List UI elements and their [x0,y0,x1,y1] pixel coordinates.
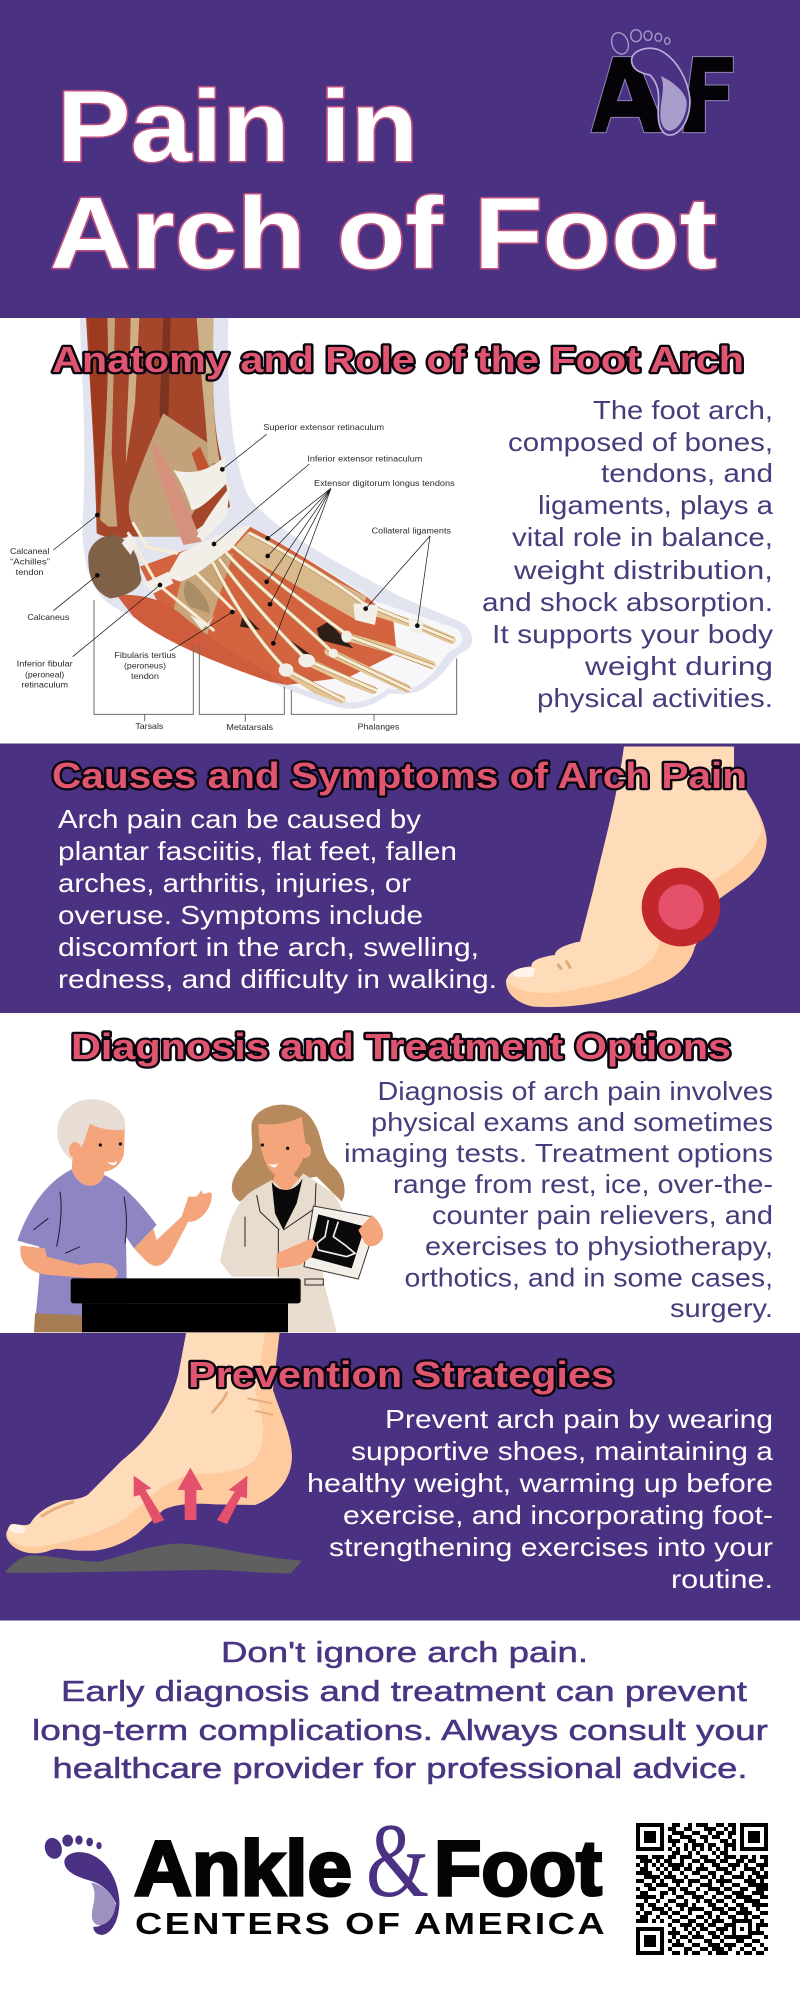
text: diagnosis body: counter pain relievers, and [432,1200,773,1230]
anatomy labels [10,422,455,732]
QR code [636,1825,768,1953]
text: diagnosis body: imaging tests. Treatment options [344,1138,773,1168]
text: closing call to action: Early diagnosis and treatment can prevent [61,1676,747,1708]
heading: prevention: Prevention Strategies [188,1354,614,1395]
text: causes body: arches, arthritis, injuries, or [58,868,411,898]
text: closing call to action: long-term complications. Always consult your [32,1715,768,1747]
text: closing call to action [32,1637,768,1785]
anatomy labels: Fibularis tertius [114,650,177,660]
text: diagnosis body: Diagnosis of arch pain involves [378,1076,773,1106]
text: prevention body: Prevent arch pain by wearing [385,1404,773,1434]
text: anatomy body: composed of bones, [508,427,773,457]
text: anatomy body: vital role in balance, [512,522,773,552]
text: causes body: Arch pain can be caused by [58,804,421,834]
text: diagnosis body [344,1076,773,1323]
panel: prevention strategies [0,1333,800,1620]
anatomy labels: tendon [16,567,44,577]
panel: anatomy [10,318,774,732]
anatomy labels: tendon [131,671,159,681]
text: diagnosis body: orthotics, and in some cases, [404,1262,773,1292]
heading: causes: Causes and Symptoms of Arch Pain [52,755,747,796]
anatomy labels: Tarsals [135,721,164,731]
heading: diagnosis: Diagnosis and Treatment Options [71,1026,731,1067]
text: causes body: redness, and difficulty in walking. [58,964,497,994]
text: anatomy body: The foot arch, [593,395,773,425]
illustration: foot with arch support and arrows [5,1333,302,1573]
text: anatomy body: weight distribution, [513,555,773,585]
illustration: patient and doctor with x-ray [17,1099,383,1332]
text: anatomy body: and shock absorption. [482,587,773,617]
footer logo: Ankle & Foot Centers of America: Ankle [134,1824,352,1912]
text: prevention body: healthy weight, warming up before [307,1468,773,1498]
illustration: foot with red pain spot [506,747,767,1007]
black redaction block [71,1278,301,1332]
anatomy labels: Metatarsals [226,722,274,732]
icon: purple footprint [42,1835,119,1935]
heading: anatomy: Anatomy and Role of the Foot Arch [52,339,744,380]
arrows: upward arch support [134,1468,247,1524]
patient figure [17,1099,212,1332]
text: anatomy body: ligaments, plays a [538,490,774,520]
footer logo: Ankle & Foot Centers of America: & [366,1802,429,1919]
anatomy labels: Inferior fibular [17,659,73,669]
toes [285,608,452,699]
anatomy labels: (peroneal) [25,669,64,679]
title [50,71,717,290]
text: causes body: overuse. Symptoms include [58,900,423,930]
anatomy labels: (peroneus) [124,661,166,671]
text: closing call to action: Don't ignore arch pain. [221,1637,588,1669]
text: causes body: discomfort in the arch, swelling, [58,932,479,962]
panel: title header [0,0,800,318]
footer logo: Ankle & Foot Centers of America [42,1802,607,1941]
anatomy labels: retinaculum [21,680,68,690]
footer logo: Ankle & Foot Centers of America: CENTERS OF AMERICA [135,1906,607,1941]
anatomy labels: Phalanges [358,721,400,731]
anatomy labels: Collateral ligaments [372,525,452,535]
anatomy labels: Extensor digitorum longus tendons [314,478,455,488]
text: anatomy body: weight during [584,651,773,681]
text: anatomy body: It supports your body [492,619,773,649]
anatomy labels: “Achilles” [10,557,50,567]
text: prevention body: routine. [671,1564,773,1594]
text: anatomy body [482,395,774,713]
text: anatomy body: physical activities. [537,683,773,713]
text: causes body [58,804,497,994]
text: prevention body: exercise, and incorporating foot- [343,1500,773,1530]
text: diagnosis body: physical exams and sometimes [371,1107,773,1137]
anatomy labels: Calcaneal [10,546,49,556]
anatomy labels: Inferior extensor retinaculum [307,454,422,464]
anatomy labels: Superior extensor retinaculum [263,422,384,432]
text: anatomy body: tendons, and [601,458,773,488]
text: prevention body: supportive shoes, maintaining a [351,1436,774,1466]
icon: AF foot logo [591,30,733,135]
illustration: labelled foot anatomy [10,318,472,732]
title: Pain in [57,71,418,183]
footer logo: Ankle & Foot Centers of America: Foot [434,1824,602,1912]
text: diagnosis body: range from rest, ice, over-the- [393,1169,773,1199]
doctor figure [220,1105,383,1332]
text: prevention body [307,1404,774,1594]
text: prevention body: strengthening exercises into your [329,1532,773,1562]
panel: causes and symptoms [0,744,800,1013]
anatomy labels: Calcaneus [27,612,70,622]
text: diagnosis body: exercises to physiotherapy, [425,1231,773,1261]
text: causes body: plantar fasciitis, flat feet, fallen [58,836,457,866]
title: Arch of Foot [50,178,717,290]
text: closing call to action: healthcare provider for professional advice. [52,1753,748,1785]
panel: diagnosis and treatment [17,1026,773,1332]
text: diagnosis body: surgery. [670,1293,773,1323]
